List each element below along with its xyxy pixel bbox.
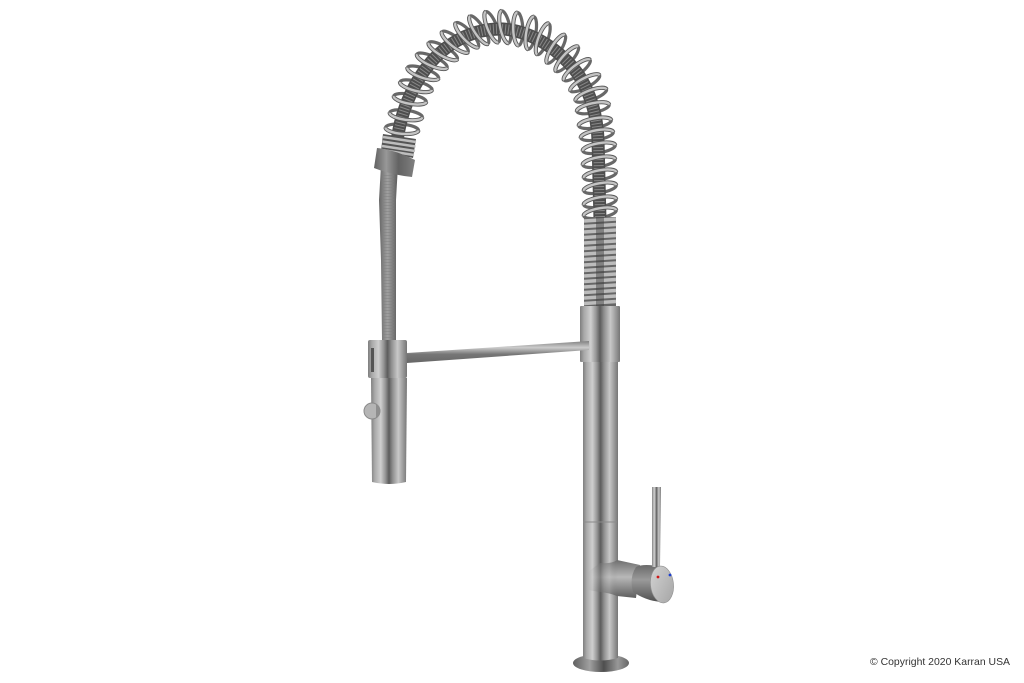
base ring xyxy=(573,654,629,672)
close-wound spring sleeve xyxy=(584,217,616,307)
lever neck xyxy=(588,560,640,598)
spray head body xyxy=(371,378,407,484)
coil back halves xyxy=(385,10,617,221)
product illustration: pull-down spring faucet xyxy=(364,8,1010,672)
coil front halves xyxy=(385,11,616,216)
spring coil and inner hose xyxy=(385,10,617,221)
lower flexible hose xyxy=(379,165,398,340)
handle lever xyxy=(652,487,661,567)
crossbar arm xyxy=(407,341,589,363)
inner hose xyxy=(396,29,600,220)
copyright notice: © Copyright 2020 Karran USA xyxy=(870,656,1010,668)
hot indicator xyxy=(657,576,659,578)
upper body sleeve xyxy=(580,306,620,362)
spray head collar xyxy=(368,340,407,378)
lever cap cylinder xyxy=(632,565,664,602)
spray button xyxy=(364,403,380,419)
cold indicator xyxy=(669,574,671,576)
lever cap face xyxy=(649,565,675,604)
faucet main body pipe xyxy=(583,360,618,655)
threaded hose collar xyxy=(374,134,416,177)
